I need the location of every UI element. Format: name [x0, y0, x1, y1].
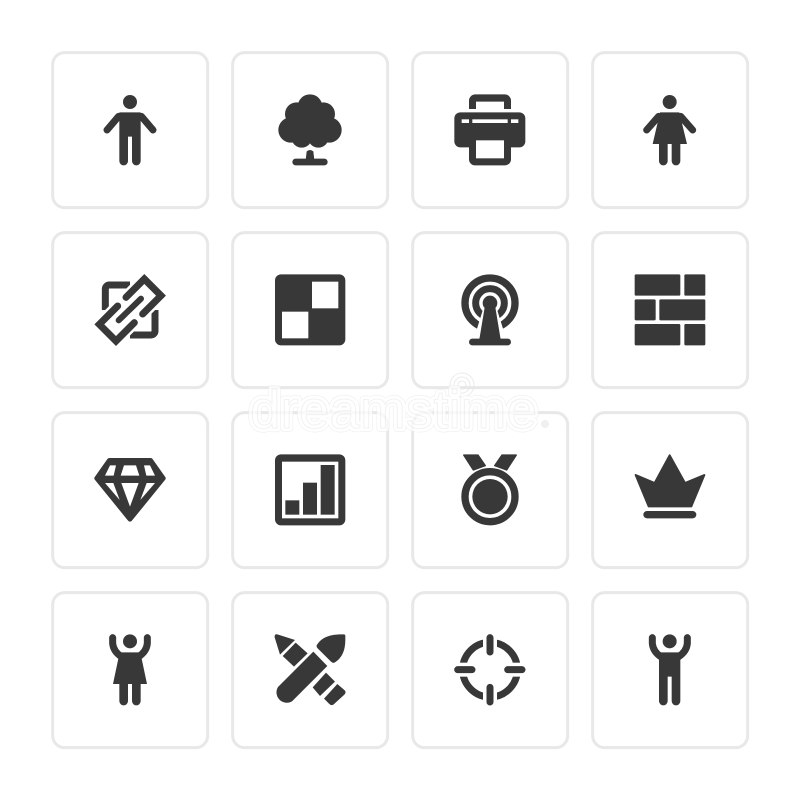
icon: printer — [454, 94, 525, 165]
watermark: dreamstime — [250, 380, 537, 440]
panel: person — [53, 53, 208, 208]
panel: diamond — [53, 413, 208, 568]
panel: link — [53, 233, 208, 388]
icon: diamond — [97, 460, 163, 519]
icon: broadcast antenna — [465, 278, 515, 345]
icon: crosshair target — [457, 637, 523, 703]
panel: tree — [233, 53, 388, 208]
panel: bricks — [593, 233, 748, 388]
icon: crown — [636, 455, 704, 518]
panel: woman arms raised — [53, 593, 208, 748]
icon: man arms raised — [652, 634, 687, 705]
icon: signal bar chart — [275, 454, 345, 525]
panel: printer — [413, 53, 568, 208]
icon: checker square — [275, 274, 345, 345]
icon: woman — [647, 95, 693, 165]
panel: man arms raised — [593, 593, 748, 748]
panel: target — [413, 593, 568, 748]
icon: medal — [464, 455, 516, 522]
icon: tree — [278, 94, 342, 165]
panel: bar chart — [233, 413, 388, 568]
panel: medal — [413, 413, 568, 568]
icon: chain link — [99, 279, 161, 341]
panel: antenna — [413, 233, 568, 388]
icon: crossed pencil and brush — [275, 634, 346, 705]
icon: woman arms raised — [113, 634, 147, 705]
panel: pencil and brush — [233, 593, 388, 748]
panel: checker — [233, 233, 388, 388]
icon: man — [107, 95, 153, 165]
watermark: dreamstime — [250, 380, 537, 440]
panel: woman — [593, 53, 748, 208]
panel: crown — [593, 413, 748, 568]
watermark: dreamstime — [250, 380, 537, 440]
icon: brick wall — [635, 274, 705, 345]
